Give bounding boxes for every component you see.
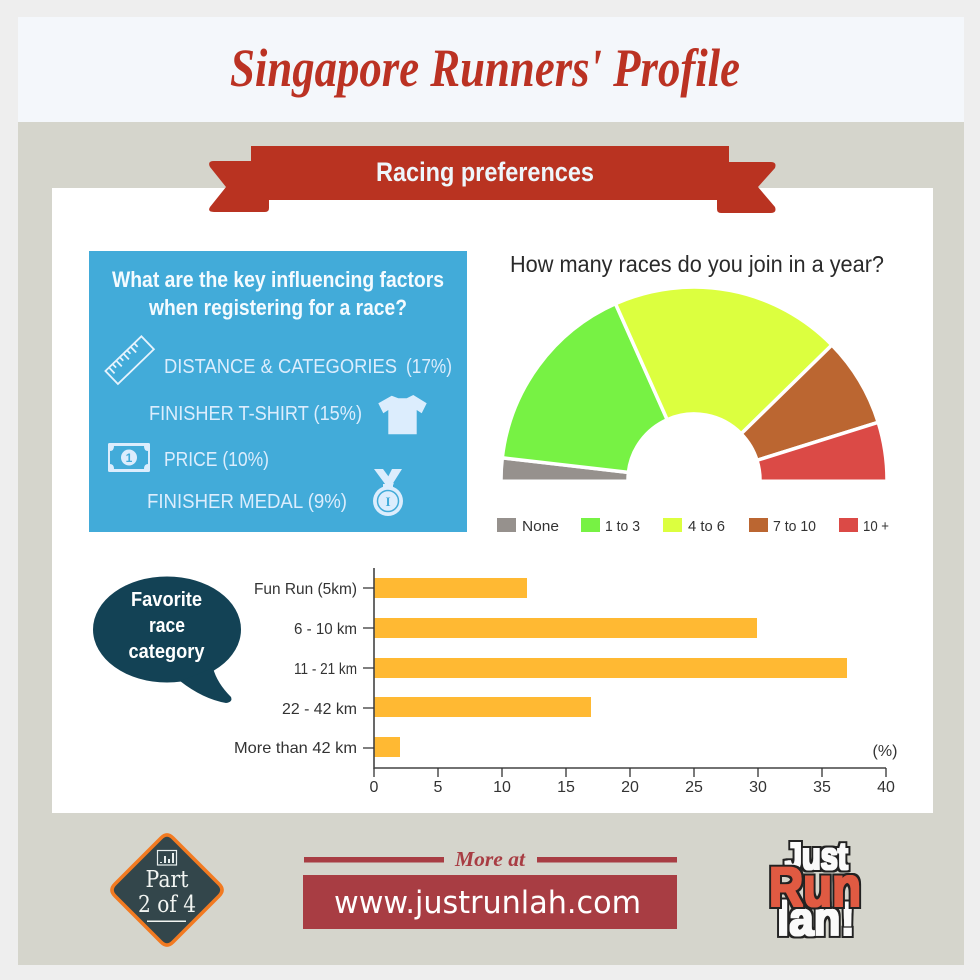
- bar chart: favorite race category: 40: [877, 779, 895, 796]
- bar chart: favorite race category: 30: [749, 779, 767, 796]
- icon: ruler: [105, 336, 154, 384]
- badge: part 2 of 4: 2 of 4: [138, 892, 196, 918]
- panel heading: when registering for a race?: [148, 295, 407, 320]
- callout: favorite race category: Favorite: [131, 589, 202, 611]
- icon: medal: [373, 469, 403, 516]
- banner: racing preferences: [209, 146, 776, 213]
- chart legend: 4 to 6: [688, 518, 725, 535]
- logo: just run lah: lah!: [777, 892, 855, 945]
- chart legend: [497, 518, 889, 535]
- bar chart: favorite race category: 5: [434, 779, 443, 796]
- bar chart: favorite race category: 25: [685, 779, 703, 796]
- factor labels: DISTANCE & CATEGORIES: [164, 356, 397, 378]
- panel: key influencing factors: [89, 251, 467, 532]
- chart legend: 1 to 3: [605, 518, 640, 535]
- chart legend: 10 +: [863, 518, 889, 535]
- callout: favorite race category: [93, 576, 241, 703]
- title: Singapore Runners' Profile: [230, 38, 740, 98]
- bar chart: favorite race category: Fun Run (5km): [254, 581, 357, 598]
- icon: medal: I: [385, 494, 391, 509]
- bar chart: favorite race category: (%): [873, 743, 897, 760]
- factor labels: [147, 356, 452, 513]
- logo: just run lah: [769, 836, 861, 945]
- factor labels: PRICE (10%): [164, 449, 269, 471]
- more at link: www.justrunlah.com: [334, 885, 641, 921]
- bar chart: favorite race category: 20: [621, 779, 639, 796]
- bar chart: favorite race category: 15: [557, 779, 575, 796]
- panel heading: What are the key influencing factors: [112, 267, 444, 292]
- chart legend: None: [522, 518, 559, 535]
- bar chart: favorite race category: More than 42 km: [234, 740, 357, 757]
- factor labels: FINISHER MEDAL (9%): [147, 491, 347, 513]
- panel: white content: [52, 188, 933, 813]
- more at label: More at: [454, 847, 526, 871]
- factor labels: FINISHER T-SHIRT (15%): [149, 403, 362, 425]
- logo: just run lah: Run: [769, 855, 861, 918]
- bar chart: favorite race category: 10: [493, 779, 511, 796]
- bar chart: favorite race category: 6 - 10 km: [294, 621, 357, 638]
- banner heading: Racing preferences: [376, 157, 594, 187]
- more at link: [303, 847, 677, 929]
- icon: banknote: [108, 443, 150, 472]
- factor labels: (17%): [406, 356, 452, 378]
- panel heading: [112, 267, 444, 320]
- header panel: [18, 17, 964, 122]
- gauge chart heading: How many races do you join in a year?: [510, 251, 884, 277]
- bar chart: favorite race category: 35: [813, 779, 831, 796]
- bar chart: favorite race category: 11 - 21 km: [294, 661, 357, 678]
- semi-donut chart: races per year: [501, 287, 887, 491]
- chart legend: 7 to 10: [773, 518, 816, 535]
- callout: favorite race category: race: [149, 615, 185, 637]
- icon: t-shirt: [378, 395, 427, 434]
- badge: part 2 of 4: [112, 835, 222, 945]
- bar chart: favorite race category: [234, 568, 897, 796]
- logo: just run lah: Just: [785, 836, 848, 878]
- badge: part 2 of 4: Part: [146, 867, 189, 893]
- icon: banknote: 1: [126, 451, 133, 465]
- bar chart: favorite race category: 22 - 42 km: [282, 701, 357, 718]
- bar chart: favorite race category: 0: [370, 779, 379, 796]
- icon: bar chart: [158, 850, 176, 865]
- website box: [303, 875, 677, 929]
- callout: favorite race category: category: [128, 641, 205, 663]
